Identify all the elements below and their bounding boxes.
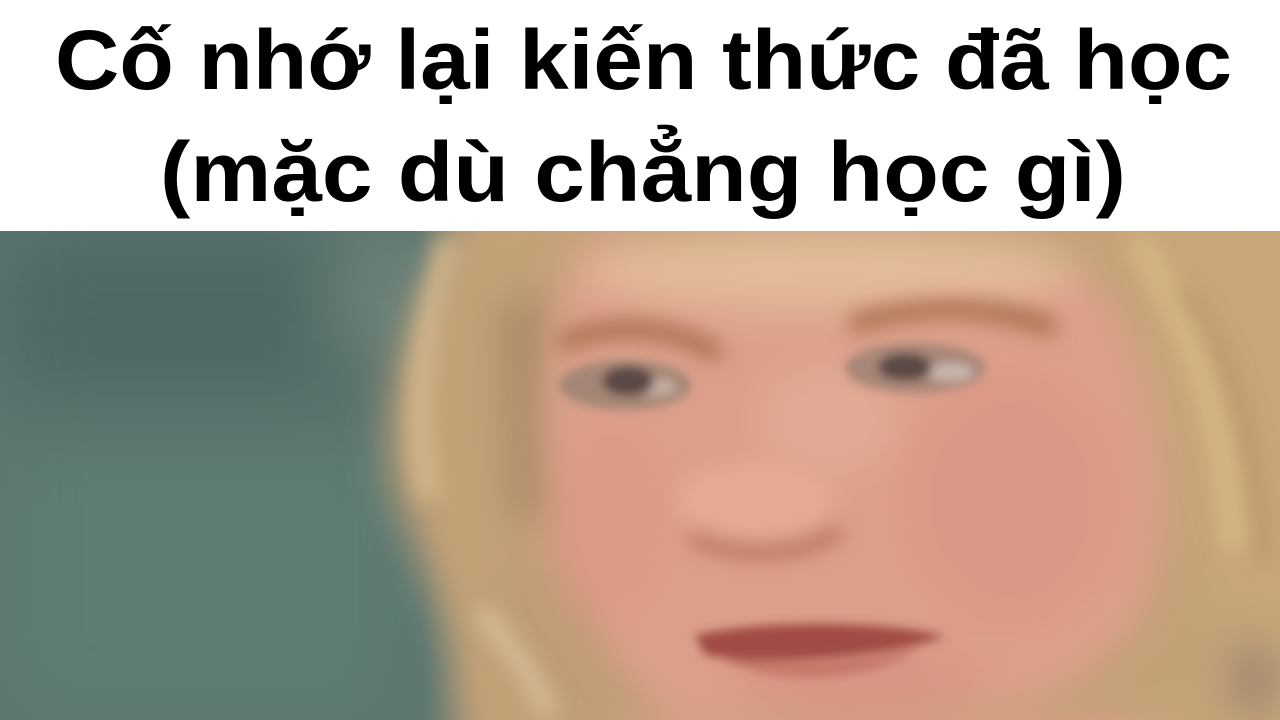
title line 1: Cố nhớ lại kiến thức đã học bbox=[55, 13, 1232, 107]
eye: right bbox=[845, 343, 985, 393]
photo: blurred portrait bbox=[0, 205, 1280, 720]
mouth bbox=[695, 624, 945, 677]
title: two-line caption bbox=[55, 13, 1232, 219]
eyebrows bbox=[560, 310, 1055, 355]
caption background bbox=[0, 0, 1280, 231]
hair bbox=[389, 205, 1280, 720]
background wall bbox=[0, 231, 1280, 720]
eye: left bbox=[559, 360, 691, 410]
title line 2: (mặc dù chẳng học gì) bbox=[160, 125, 1126, 219]
hair highlight strands bbox=[420, 240, 1262, 716]
face bbox=[544, 230, 1163, 720]
nose bbox=[677, 462, 840, 552]
